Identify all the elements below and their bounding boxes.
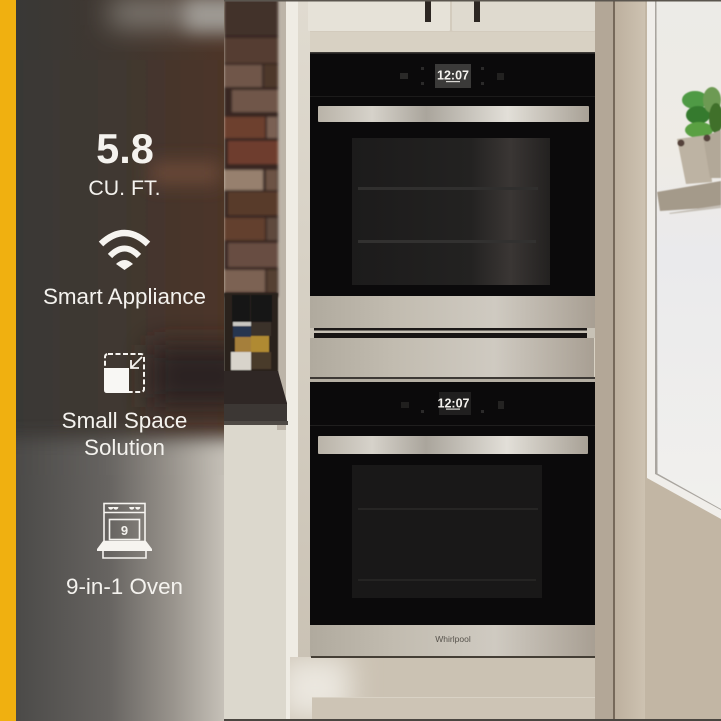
upper oven control panel: 12:07	[437, 68, 469, 82]
bottom edge line	[224, 719, 721, 721]
lower oven	[310, 377, 595, 658]
upper oven control panel	[310, 64, 595, 97]
icon: small space	[104, 354, 144, 393]
brand name: Whirlpool	[435, 634, 471, 644]
lower oven control panel: 12:07	[438, 396, 470, 410]
shelf	[657, 181, 721, 211]
upper cabinet doors	[308, 0, 595, 31]
icon: wifi	[101, 233, 148, 270]
frosted overlay panel	[16, 0, 224, 721]
small space solution label: Solution	[84, 435, 165, 460]
brick wall	[224, 0, 278, 297]
background wall and cabinetry	[224, 2, 595, 719]
lower oven control panel	[310, 392, 595, 426]
lower oven handle	[318, 436, 588, 454]
capacity unit: CU. FT.	[88, 176, 161, 200]
upper oven	[310, 52, 595, 328]
vent gap	[310, 328, 595, 338]
plant leaves	[682, 87, 721, 138]
lower oven window	[352, 465, 542, 598]
icon: 9-in-1 oven: 9	[121, 523, 128, 538]
small space solution label: Small Space	[62, 408, 187, 433]
windowsill shelf and plants	[657, 87, 721, 214]
icon: 9-in-1 oven	[97, 504, 152, 558]
steel drawer	[310, 338, 594, 377]
capacity figure: 5.8	[96, 125, 154, 172]
yellow accent bar	[0, 0, 16, 721]
top edge line	[224, 0, 721, 2]
upper oven window	[352, 138, 550, 285]
9-in-1 oven label: 9-in-1 Oven	[66, 574, 183, 599]
small space solution label	[62, 408, 187, 460]
smart appliance label: Smart Appliance	[43, 284, 206, 309]
plant pots	[677, 130, 721, 184]
upper oven steel base	[310, 296, 595, 328]
spice jars	[224, 293, 278, 373]
upper oven handle	[318, 106, 589, 122]
countertop	[224, 371, 288, 425]
lower oven steel base	[310, 625, 595, 657]
lower cabinet door	[312, 697, 595, 719]
right pier and window	[595, 0, 721, 721]
